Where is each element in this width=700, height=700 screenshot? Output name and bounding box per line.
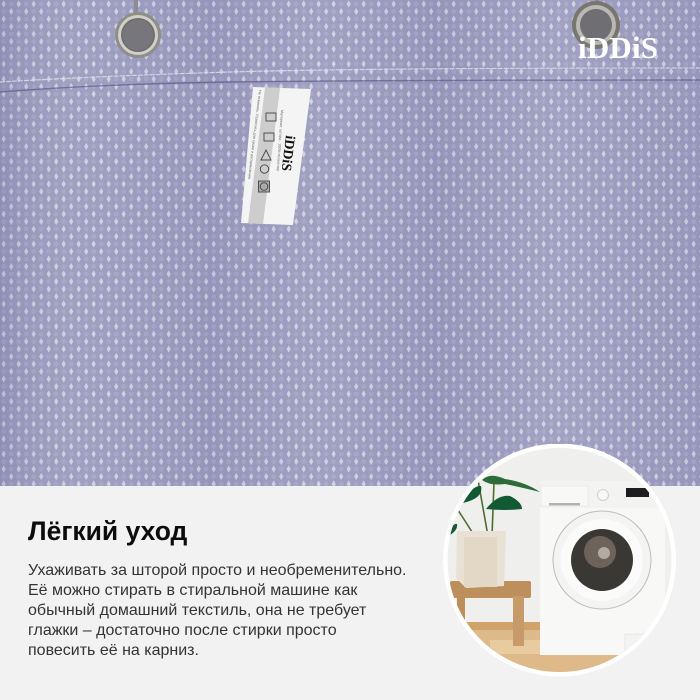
body text: Её можно стирать в стиральной машине как xyxy=(28,582,357,599)
photo: curtain fabric with grommets and label xyxy=(0,0,700,486)
washing machine xyxy=(540,481,665,655)
body text: глажки – достаточно после стирки просто xyxy=(28,622,337,639)
grommet: left xyxy=(115,0,161,58)
tote bag xyxy=(456,531,506,588)
body text: повесить её на карниз. xyxy=(28,642,199,659)
circular photo: washing machine xyxy=(443,444,676,676)
floor xyxy=(466,622,647,672)
body text: Ухаживать за шторой просто и необременительно. xyxy=(28,562,406,579)
stool xyxy=(450,581,531,646)
plant xyxy=(450,476,540,536)
grommet: right xyxy=(572,0,620,49)
text panel xyxy=(0,486,700,700)
care icons xyxy=(258,113,276,192)
brand logo: iDDiS xyxy=(578,30,658,65)
body text xyxy=(28,562,406,659)
heading: Лёгкий уход xyxy=(28,516,187,546)
label instructions: Не отжимать. Развесить для сушки и распрямления. xyxy=(247,90,262,180)
label care text: Материал: штора - 100% полиэстер xyxy=(276,110,284,171)
label brand: iDDiS xyxy=(278,135,297,172)
body text: обычный домашний текстиль, она не требует xyxy=(28,602,366,619)
sewn label xyxy=(241,87,311,225)
hem stitching xyxy=(0,68,700,92)
